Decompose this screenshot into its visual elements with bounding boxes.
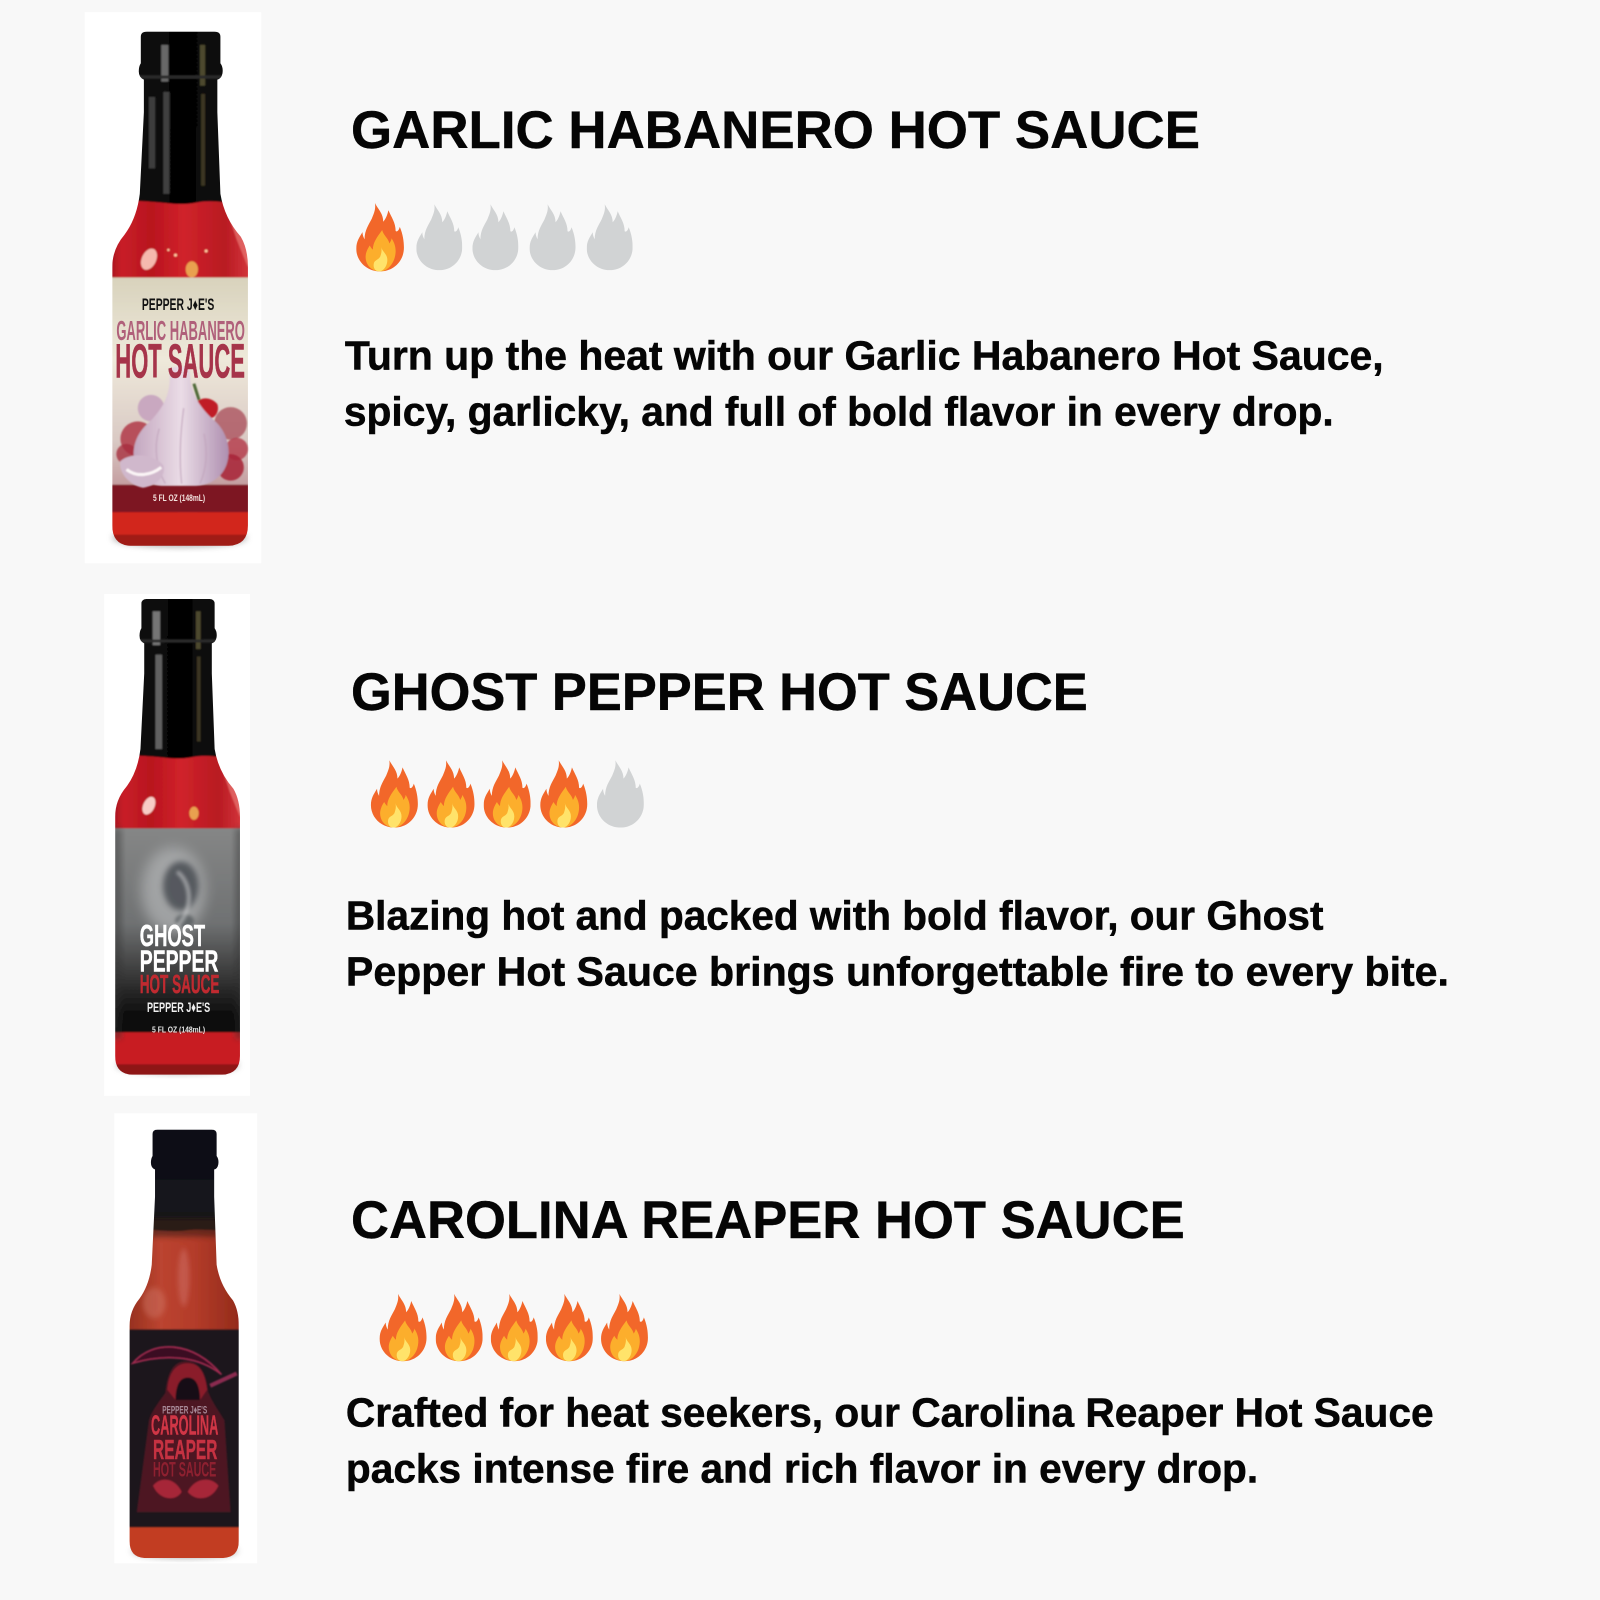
heat rating: 1 of 5 (356, 203, 633, 271)
bottle label text: PEPPER (140, 944, 218, 978)
heading: carolina reaper: CAROLINA REAPER HOT SAUCE (351, 1191, 1185, 1250)
bottle label text: REAPER (153, 1434, 217, 1465)
description: carolina reaper (346, 1390, 1434, 1492)
bottle label text (151, 1404, 218, 1482)
panel: ghost pepper product image (115, 599, 240, 1076)
reaper illustration (133, 1347, 237, 1512)
panel: garlic habanero product image: HOT SAUCE (115, 336, 245, 389)
bottle label text: HOT SAUCE (153, 1458, 216, 1482)
bottle label text (115, 296, 245, 503)
description: ghost pepper (346, 893, 1449, 995)
bottle label text: GHOST (140, 919, 205, 953)
bottle label text: 5 FL OZ (148mL) (152, 1026, 205, 1035)
description: garlic habanero: Turn up the heat with our Garlic Habanero Hot Sauce, (345, 332, 1384, 378)
panel: carolina reaper product image: CAROLINA (151, 1410, 218, 1441)
bottle label text: PEPPER J♦E'S (147, 1000, 210, 1016)
bottle label text: PEPPER J♦E'S (162, 1404, 207, 1416)
bottle label text (140, 919, 219, 1035)
heat rating: 5 of 5 (380, 1294, 648, 1361)
panel: carolina reaper product image (130, 1130, 239, 1561)
description: garlic habanero (344, 332, 1384, 435)
heat rating: 4 of 5 (371, 760, 644, 828)
heading: ghost pepper: GHOST PEPPER HOT SAUCE (351, 663, 1088, 722)
panel: garlic habanero product image (112, 32, 249, 550)
bottle label text: 5 FL OZ (148mL) (153, 493, 205, 503)
panel: garlic habanero product image: GARLIC HABANERO (116, 315, 245, 346)
heading: garlic habanero: GARLIC HABANERO HOT SAUCE (351, 101, 1200, 160)
garlic and peppers illustration (116, 367, 248, 488)
description: ghost pepper: Blazing hot and packed with bold flavor, our Ghost (346, 893, 1324, 939)
bottle label text: HOT SAUCE (140, 971, 219, 999)
description: carolina reaper: Crafted for heat seekers, our Carolina Reaper Hot Sauce (346, 1390, 1434, 1436)
description: ghost pepper: Pepper Hot Sauce brings unforgettable fire to every bite. (346, 949, 1449, 995)
description: carolina reaper: packs intense fire and rich flavor in every drop. (346, 1446, 1258, 1492)
bottle label text: PEPPER J♦E'S (142, 296, 214, 314)
description: garlic habanero: spicy, garlicky, and full of bold flavor in every drop. (344, 389, 1334, 435)
